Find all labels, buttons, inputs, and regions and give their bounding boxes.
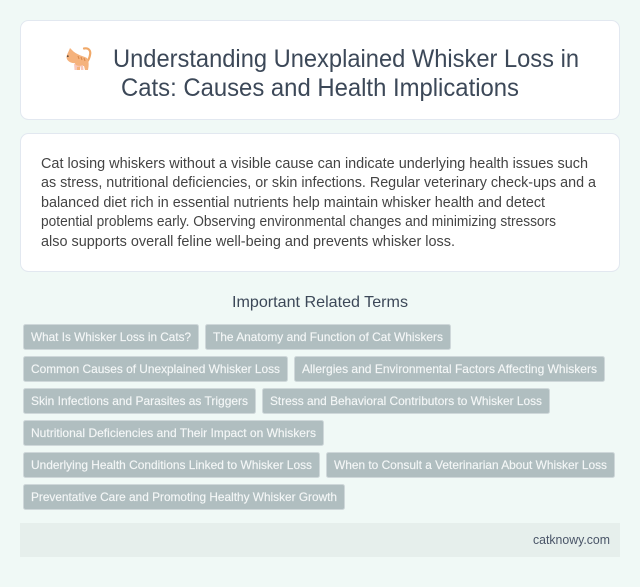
panel: description card bbox=[20, 134, 620, 272]
panel: title card bbox=[20, 20, 620, 120]
title text: Understanding Unexplained Whisker Loss in bbox=[113, 46, 579, 73]
title text bbox=[113, 46, 579, 102]
tag: What Is Whisker Loss in Cats? bbox=[31, 330, 191, 344]
tag: When to Consult a Veterinarian About Whisker Loss bbox=[334, 458, 607, 472]
tag list bbox=[24, 324, 614, 510]
tag: Common Causes of Unexplained Whisker Loss bbox=[31, 362, 280, 376]
tag: Underlying Health Conditions Linked to Whisker Loss bbox=[31, 458, 312, 472]
tag bbox=[262, 388, 550, 414]
tag bbox=[294, 356, 604, 382]
description text: as stress, nutritional deficiencies, or skin infections. Regular veterinary check-ups and a bbox=[41, 175, 597, 191]
tag: Skin Infections and Parasites as Triggers bbox=[31, 394, 248, 408]
tag: Stress and Behavioral Contributors to Whisker Loss bbox=[270, 394, 542, 408]
tag bbox=[24, 324, 198, 350]
footer bar bbox=[20, 523, 620, 557]
description text: balanced diet rich in essential nutrients help maintain whisker health and detect bbox=[41, 195, 545, 211]
tag bbox=[326, 452, 614, 478]
description text bbox=[41, 156, 597, 250]
footer source text: catknowy.com bbox=[533, 532, 610, 547]
description text: also supports overall feline well-being and prevents whisker loss. bbox=[41, 234, 455, 250]
tag bbox=[24, 388, 256, 414]
tag bbox=[206, 324, 450, 350]
tag bbox=[24, 356, 288, 382]
description text: potential problems early. Observing environmental changes and minimizing stressors bbox=[41, 214, 556, 230]
icon: cat bbox=[66, 48, 90, 70]
tag bbox=[24, 420, 324, 446]
description text: Cat losing whiskers without a visible cause can indicate underlying health issues such bbox=[41, 156, 588, 172]
title text: Cats: Causes and Health Implications bbox=[121, 75, 519, 102]
tag: Allergies and Environmental Factors Affecting Whiskers bbox=[302, 362, 597, 376]
tag: The Anatomy and Function of Cat Whiskers bbox=[213, 330, 443, 344]
tag bbox=[24, 484, 344, 510]
tag: Preventative Care and Promoting Healthy Whisker Growth bbox=[31, 490, 337, 504]
tag: Nutritional Deficiencies and Their Impact on Whiskers bbox=[31, 426, 316, 440]
heading: related terms: Important Related Terms bbox=[232, 294, 408, 311]
tag bbox=[24, 452, 320, 478]
